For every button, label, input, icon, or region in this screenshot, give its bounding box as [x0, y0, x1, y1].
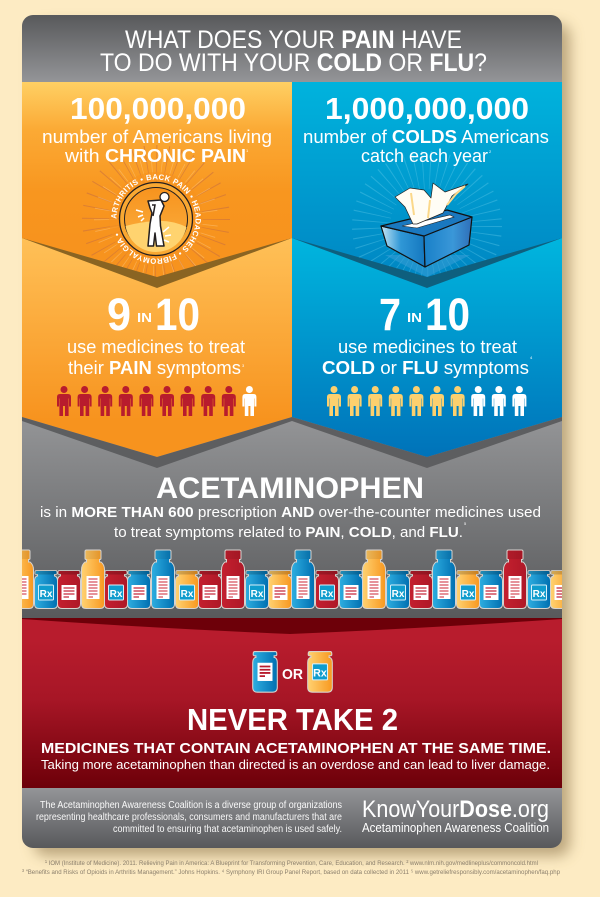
footnotes — [22, 860, 560, 876]
stat: 9 in 10: 3 — [242, 363, 245, 368]
stat: chronic pain: 1 — [246, 148, 249, 153]
stat: 7 in 10: use medicines to treat — [338, 337, 517, 357]
bottle shelf: Rx — [462, 589, 475, 600]
upper orange area — [22, 238, 292, 288]
lower orange chevron — [22, 238, 292, 457]
stat: chronic pain: 100,000,000 — [70, 91, 246, 126]
stat: chronic pain: with CHRONIC PAIN — [64, 146, 246, 166]
bottle shelf: Rx — [181, 589, 194, 600]
logo: know your dose — [362, 800, 548, 834]
stat: colds: number of COLDS Americans — [303, 127, 549, 147]
stat: chronic pain — [43, 98, 271, 162]
stat: 9 in 10: 9 — [107, 289, 131, 340]
panel: pain column — [22, 82, 292, 457]
bottle shelf: Rx — [251, 589, 264, 600]
text: coalition description: The Acetaminophen Awareness Coalition is a diverse group of organizations — [40, 800, 342, 811]
heading: title: TO DO WITH YOUR COLD OR FLU? — [100, 49, 487, 77]
heading: title — [100, 30, 486, 71]
icon: rx bottle — [308, 652, 332, 692]
text: acetaminophen description: is in MORE THAN 600 prescription AND over-the-counter medicines used — [40, 504, 541, 521]
stat: colds — [303, 91, 549, 166]
bottle shelf — [10, 550, 574, 608]
panel: warning — [22, 618, 562, 788]
icon: tissue box — [371, 170, 483, 282]
heading: acetaminophen: ACETAMINOPHEN — [156, 472, 424, 505]
stat: 9 in 10: 10 — [155, 289, 200, 340]
bottle shelf: Rx — [110, 589, 123, 600]
text: coalition description: representing healthcare professionals, consumers and manufacturers that are — [36, 812, 342, 823]
stat: 9 in 10: their PAIN symptoms — [68, 358, 241, 378]
stat: 9 in 10 — [68, 298, 245, 378]
stat: 7 in 10 — [322, 298, 532, 378]
heading: title: WHAT DOES YOUR PAIN HAVE — [125, 26, 462, 54]
stat: colds: catch each year — [361, 146, 488, 166]
chart: 9 in 10 people — [57, 386, 256, 416]
icon: otc bottle — [253, 652, 277, 692]
panel: footer — [22, 788, 562, 848]
stat: colds: 2 — [489, 149, 492, 154]
red warning area — [22, 619, 562, 788]
stat: colds: 1,000,000,000 — [325, 91, 529, 126]
upper blue area — [292, 238, 562, 288]
dark red band — [22, 618, 562, 634]
text: coalition description — [36, 800, 342, 835]
heading: never take 2: NEVER TAKE 2 — [187, 702, 398, 737]
text: acetaminophen description: to treat symptoms related to PAIN, COLD, and FLU. — [114, 524, 463, 541]
icon: back pain medallion — [82, 145, 230, 276]
stat: 7 in 10: IN — [407, 310, 422, 325]
stat: 9 in 10: IN — [137, 310, 152, 325]
stat: 9 in 10: use medicines to treat — [67, 337, 245, 357]
text: acetaminophen description — [40, 504, 541, 541]
footnotes: ¹ IOM (Institute of Medicine). 2011. Relieving Pain in America: A Blueprint for Transforming Prevention, Care, Education, and Research. ² www.nlm.nih.gov/medlineplus/commoncold.html — [45, 860, 538, 867]
header band — [22, 15, 562, 82]
logo: know your dose: KnowYourDose.org — [362, 796, 549, 823]
panel: cold column — [292, 82, 562, 457]
label: or: OR — [282, 666, 303, 683]
chevron shadows on gray — [22, 417, 562, 468]
icon: back pain medallion: ARTHRITIS • BACK PAIN • HEADACHES • FIBROMYALGIA • — [111, 174, 201, 264]
chart: 7 in 10 people — [327, 386, 526, 416]
stat: 7 in 10: 4 — [530, 355, 533, 360]
stat: 7 in 10: COLD or FLU symptoms — [322, 358, 529, 378]
stat: 7 in 10: 10 — [425, 289, 470, 340]
text: overdose warning: Taking more acetaminophen than directed is an overdose and can lead to liver damage. — [41, 757, 550, 772]
bottle shelf: Rx — [533, 589, 546, 600]
stat: 7 in 10: 7 — [379, 289, 401, 340]
middle gray band — [22, 410, 562, 620]
stat: chronic pain: number of Americans living — [42, 127, 272, 147]
bottle shelf: Rx — [40, 589, 53, 600]
text: acetaminophen description: 5 — [464, 521, 467, 526]
bottle shelf: Rx — [392, 589, 405, 600]
lower blue chevron — [292, 238, 562, 457]
bottle shelf: Rx — [321, 589, 334, 600]
logo: know your dose: Acetaminophen Awareness Coalition — [362, 821, 549, 835]
text: warning subhead: MEDICINES THAT CONTAIN ACETAMINOPHEN AT THE SAME TIME. — [41, 740, 551, 757]
icon: rx bottle: Rx — [313, 668, 327, 680]
text: coalition description: committed to ensuring that acetaminophen is used safely. — [113, 824, 342, 835]
